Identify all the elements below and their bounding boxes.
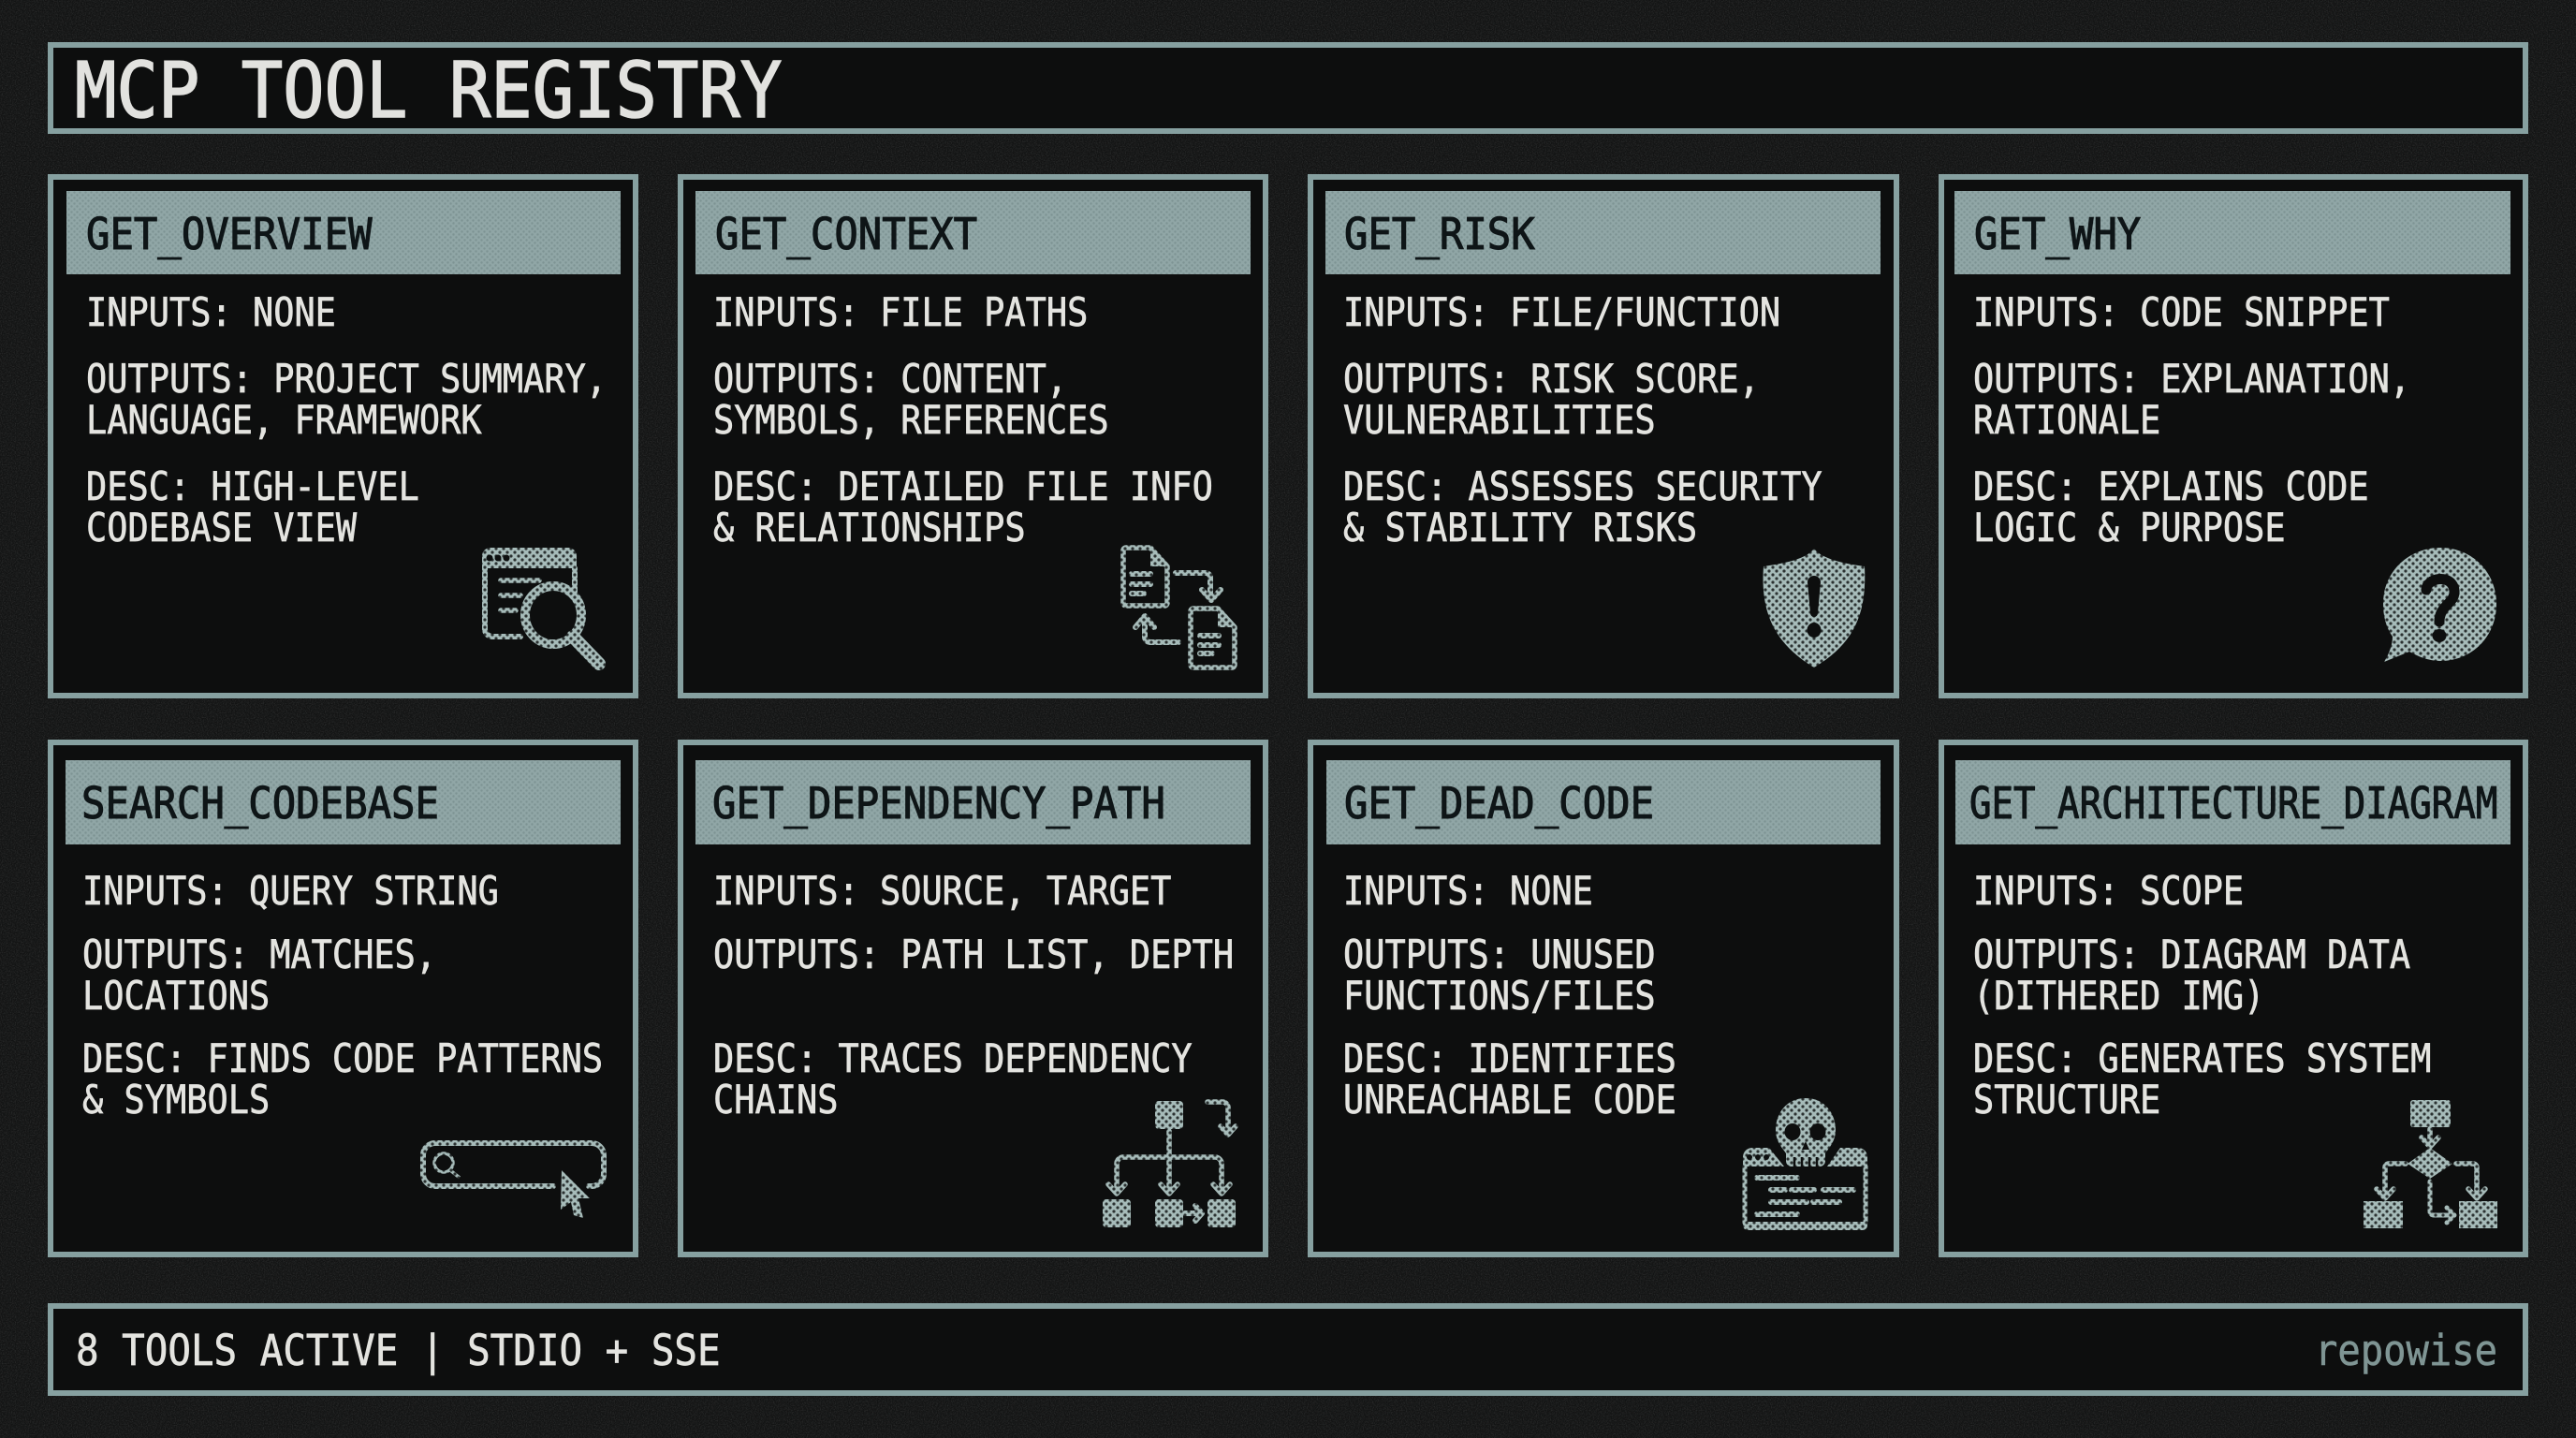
text block: get_overview details: DESC: HIGH-LEVEL <box>86 464 419 510</box>
text block: get_dead_code details: FUNCTIONS/FILES <box>1343 974 1656 1020</box>
icon: architecture flowchart <box>2364 1100 2497 1228</box>
text block: get_context details: OUTPUTS: CONTENT, <box>713 357 1067 403</box>
panel: get_risk <box>1310 177 1896 696</box>
text block: get_architecture_diagram details: DESC: GENERATES SYSTEM <box>1973 1036 2431 1082</box>
footer bar <box>51 1306 2525 1393</box>
panel: get_dependency_path <box>681 742 1266 1255</box>
heading bar: get_overview: GET_OVERVIEW <box>86 210 373 260</box>
text block: get_overview details: CODEBASE VIEW <box>86 506 357 551</box>
text block: get_architecture_diagram details: (DITHERED IMG) <box>1973 974 2264 1020</box>
icon: skull over code window <box>1743 1098 1867 1230</box>
footer brand: repowise <box>2315 1327 2497 1376</box>
text block: search_codebase details: LOCATIONS <box>82 974 270 1020</box>
text block: get_context details: SYMBOLS, REFERENCES <box>713 398 1109 444</box>
text block: search_codebase details: OUTPUTS: MATCHES, <box>82 932 436 978</box>
title bar <box>51 45 2525 136</box>
panel: get_architecture_diagram <box>1941 742 2525 1255</box>
text block: get_risk details: DESC: ASSESSES SECURITY <box>1343 464 1822 510</box>
text block: get_architecture_diagram details: INPUTS: SCOPE <box>1973 869 2244 915</box>
heading bar: get_dead_code: GET_DEAD_CODE <box>1344 779 1654 829</box>
text block: get_why details: INPUTS: CODE SNIPPET <box>1973 290 2390 336</box>
heading bar: get_risk: GET_RISK <box>1344 210 1535 260</box>
text block: get_why details <box>1973 290 2410 551</box>
icon: dependency tree <box>1103 1101 1236 1227</box>
icon: linked documents <box>1123 548 1236 668</box>
text block: get_why details: DESC: EXPLAINS CODE <box>1973 464 2369 510</box>
text block: get_why details: RATIONALE <box>1973 398 2160 444</box>
text block: get_architecture_diagram details: STRUCTURE <box>1973 1078 2160 1123</box>
text block: search_codebase details: DESC: FINDS CODE PATTERNS <box>82 1036 603 1082</box>
heading bar: get_overview <box>66 191 621 274</box>
text block: get_context details <box>713 290 1213 551</box>
text block: get_architecture_diagram details: OUTPUTS: DIAGRAM DATA <box>1973 932 2410 978</box>
text block: get_dependency_path details <box>713 869 1234 1123</box>
heading bar: get_context: GET_CONTEXT <box>715 210 977 260</box>
icon: question speech bubble <box>2383 548 2496 662</box>
icon: shield with exclamation <box>1764 549 1865 668</box>
text block: get_dead_code details: OUTPUTS: UNUSED <box>1343 932 1656 978</box>
heading bar: get_why: GET_WHY <box>1974 210 2141 260</box>
text block: get_dependency_path details: CHAINS <box>713 1078 838 1123</box>
heading bar: get_dependency_path <box>695 760 1251 844</box>
text block: search_codebase details: INPUTS: QUERY STRING <box>82 869 499 915</box>
heading bar: get_risk <box>1325 191 1881 274</box>
panel: search_codebase <box>51 742 636 1255</box>
heading bar: get_context <box>695 191 1251 274</box>
panel: get_dead_code <box>1310 742 1896 1255</box>
text block: get_context details: DESC: DETAILED FILE INFO <box>713 464 1213 510</box>
text block: get_overview details <box>86 290 607 551</box>
text block: get_context details: & RELATIONSHIPS <box>713 506 1026 551</box>
heading bar: get_why <box>1954 191 2510 274</box>
icon: search bar with cursor <box>423 1143 604 1218</box>
text block: get_why details: OUTPUTS: EXPLANATION, <box>1973 357 2410 403</box>
heading bar: search_codebase <box>66 760 621 844</box>
text block: get_overview details: OUTPUTS: PROJECT SUMMARY, <box>86 357 607 403</box>
heading bar: get_architecture_diagram: GET_ARCHITECTURE_DIAGRAM <box>1969 779 2497 829</box>
footer status text: 8 TOOLS ACTIVE | STDIO + SSE <box>76 1327 721 1376</box>
text block: get_architecture_diagram details <box>1973 869 2431 1123</box>
panel: get_why <box>1941 177 2525 696</box>
heading bar: get_architecture_diagram <box>1955 760 2510 844</box>
panel: get_context <box>681 177 1266 696</box>
text block: get_context details: INPUTS: FILE PATHS <box>713 290 1088 336</box>
text block: get_overview details: INPUTS: NONE <box>86 290 336 336</box>
text block: get_dead_code details: INPUTS: NONE <box>1343 869 1593 915</box>
text block: get_dependency_path details: INPUTS: SOURCE, TARGET <box>713 869 1171 915</box>
text block: get_why details: LOGIC & PURPOSE <box>1973 506 2286 551</box>
text block: get_risk details <box>1343 290 1822 551</box>
text block: get_overview details: LANGUAGE, FRAMEWORK <box>86 398 482 444</box>
text block: get_risk details: INPUTS: FILE/FUNCTION <box>1343 290 1780 336</box>
heading bar: search_codebase: SEARCH_CODEBASE <box>81 779 439 829</box>
text block: search_codebase details: & SYMBOLS <box>82 1078 270 1123</box>
text block: search_codebase details <box>82 869 603 1123</box>
text block: get_dead_code details: DESC: IDENTIFIES <box>1343 1036 1676 1082</box>
heading bar: get_dead_code <box>1326 760 1881 844</box>
text block: get_dead_code details: UNREACHABLE CODE <box>1343 1078 1676 1123</box>
text block: get_dependency_path details: DESC: TRACES DEPENDENCY <box>713 1036 1193 1082</box>
text block: get_dead_code details <box>1343 869 1676 1123</box>
heading bar: get_dependency_path: GET_DEPENDENCY_PATH <box>712 779 1165 829</box>
icon: window with magnifier <box>482 548 599 664</box>
panel: get_overview <box>51 177 636 696</box>
text block: get_risk details: & STABILITY RISKS <box>1343 506 1697 551</box>
text block: get_dependency_path details: OUTPUTS: PATH LIST, DEPTH <box>713 932 1234 978</box>
text block: get_risk details: OUTPUTS: RISK SCORE, <box>1343 357 1760 403</box>
text block: get_risk details: VULNERABILITIES <box>1343 398 1656 444</box>
title: MCP TOOL REGISTRY <box>75 47 782 136</box>
